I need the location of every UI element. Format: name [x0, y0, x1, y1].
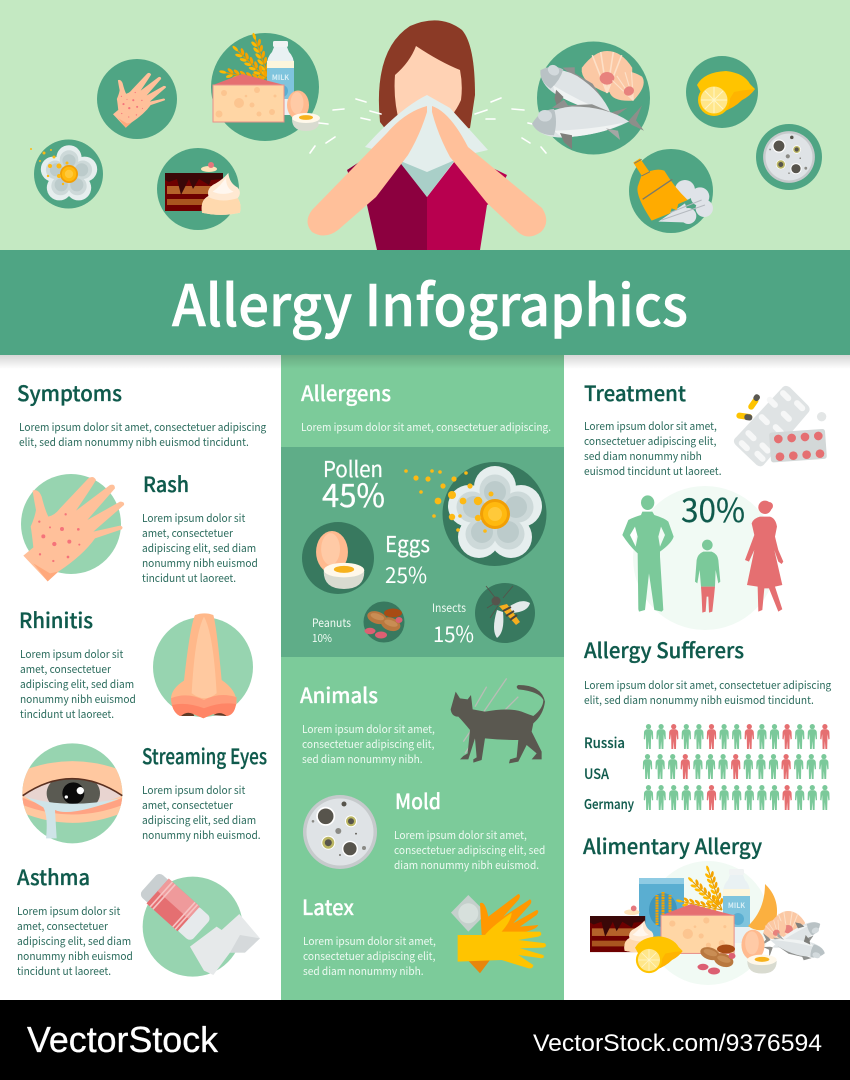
illustration: sneezing woman: [308, 20, 546, 250]
footer url: VectorStock.com/9376594: [533, 1030, 822, 1057]
text: rash description: Lorem ipsum dolor sit: [142, 511, 245, 526]
icon: egg: [302, 522, 374, 594]
text: streaming eyes description: Lorem ipsum dolor sit: [142, 783, 245, 798]
chart row: USA: [584, 754, 829, 784]
chart row: Germany: Germany: [584, 793, 635, 813]
chart: allergic people share: [622, 484, 783, 630]
icon: mold dish: [303, 795, 377, 869]
text: treatment description: euismod tincidunt ut laoreet.: [584, 464, 722, 479]
heading: rhinitis: Rhinitis: [19, 605, 93, 635]
heading: symptoms: Symptoms: [17, 378, 122, 408]
text: animals description: consectetuer adipiscing elit,: [302, 737, 434, 752]
icon: mold dish in circle: [756, 124, 822, 190]
banner shadow: [0, 355, 850, 369]
text: rash description: adipiscing elit, sed diam: [142, 541, 256, 556]
footer bar: [0, 1000, 850, 1080]
text: latex description: Lorem ipsum dolor sit amet,: [303, 934, 436, 949]
value: 15%: 15%: [433, 617, 474, 649]
text: asthma description: tincidunt ut laoreet.: [17, 964, 111, 979]
footer logo: VectorStock: [27, 1019, 219, 1060]
backdrop circle: [633, 486, 777, 630]
heading: animals: Animals: [300, 680, 378, 710]
text: allergens description: Lorem ipsum dolor sit amet, consectetuer adipiscing.: [301, 420, 551, 435]
heading: allergy sufferers: Allergy Sufferers: [584, 635, 744, 665]
text: asthma description: Lorem ipsum dolor sit: [17, 904, 120, 919]
icon: fish and shells in circle: [528, 42, 650, 154]
text: asthma description: adipiscing elit, sed diam: [17, 934, 131, 949]
icon: peanuts: [364, 602, 404, 642]
background: top scene: [0, 0, 850, 250]
text: sufferers description: Lorem ipsum dolor sit amet, consectetuer adipiscing: [584, 678, 831, 693]
icon: cat: [451, 678, 545, 763]
text: asthma description: nonummy nibh euismod: [17, 949, 133, 964]
text: streaming eyes description: nonummy nibh euismod.: [142, 828, 261, 843]
text: treatment description: Lorem ipsum dolor sit amet,: [584, 419, 717, 434]
text: rash description: amet, consectetuer: [142, 526, 234, 541]
text: sufferers description: elit, sed diam nonummy nibh euismod tincidunt.: [584, 693, 814, 708]
icon: inhaler: [138, 871, 260, 977]
heading: asthma: Asthma: [17, 862, 90, 892]
text: rhinitis description: amet, consectetuer: [20, 662, 112, 677]
heading: treatment: Treatment: [584, 378, 686, 408]
value: 10%: 10%: [312, 630, 332, 646]
label: eggs: Eggs: [385, 527, 430, 559]
chart row: Russia: [584, 724, 830, 753]
icon: nose: [153, 613, 253, 718]
heading: streaming eyes: Streaming Eyes: [142, 741, 267, 771]
value: 45%: 45%: [322, 471, 385, 517]
value: 25%: 25%: [385, 558, 427, 590]
icon: pills and blisters: [734, 386, 827, 466]
icon: streaming eye: [20, 743, 125, 843]
heading: latex: Latex: [302, 892, 354, 922]
icon: flower in circle: [30, 140, 103, 208]
text: streaming eyes description: amet, consectetuer: [142, 798, 234, 813]
text: symptoms description: elit, sed diam nonummy nibh euismod tincidunt.: [19, 435, 249, 450]
panel: centre column background: [281, 355, 564, 1000]
label: insects: Insects: [432, 600, 466, 616]
title: Allergy Infographics: [172, 261, 688, 343]
heading: allergens: Allergens: [301, 378, 391, 408]
text: rhinitis description: tincidunt ut laoreet.: [20, 707, 114, 722]
icon: bee: [475, 583, 535, 643]
panel: left column background: [0, 355, 281, 1000]
hair: [379, 20, 475, 135]
text: asthma description: amet, consectetuer: [17, 919, 109, 934]
text: mold description: consectetuer adipiscing elit, sed: [394, 843, 545, 858]
arms: [308, 106, 427, 236]
text: rhinitis description: Lorem ipsum dolor sit: [20, 647, 123, 662]
text: animals description: Lorem ipsum dolor sit amet,: [302, 722, 435, 737]
text: treatment description: consectetuer adipiscing elit,: [584, 434, 716, 449]
chart row: Russia: Russia: [584, 733, 625, 753]
text: latex description: sed diam nonummy nibh.: [303, 964, 424, 979]
heading: rash: Rash: [143, 469, 189, 499]
icon: dairy and cereals in circle: [211, 31, 320, 141]
icon: lemon in circle: [686, 56, 758, 128]
value: 30%: 30%: [681, 484, 745, 532]
text: latex description: consectetuer adipiscing elit,: [303, 949, 435, 964]
illustration: allergenic foods: [590, 861, 828, 985]
silhouettes: man, child and woman: [622, 495, 783, 613]
text: streaming eyes description: adipiscing elit, sed diam: [142, 813, 256, 828]
icon: latex gloves: [451, 894, 546, 973]
shirt: [347, 155, 427, 250]
text: rash description: tincidunt ut laoreet.: [142, 571, 236, 586]
chart row: Germany: [584, 785, 830, 813]
banner: [0, 250, 850, 355]
sneeze marks: [310, 98, 546, 153]
icon: rash hand in circle: [97, 59, 177, 139]
text: mold description: Lorem ipsum dolor sit amet,: [394, 828, 527, 843]
icon: flower with pollen: [404, 462, 546, 566]
heading: mold: Mold: [395, 786, 441, 816]
label: pollen: Pollen: [323, 452, 383, 484]
panel: allergen percentages: [281, 447, 564, 657]
tissue: [365, 95, 488, 197]
text: rhinitis description: adipiscing elit, sed diam: [20, 677, 134, 692]
icon: rash hand: [21, 474, 124, 581]
text: rhinitis description: nonummy nibh euismod: [20, 692, 136, 707]
text: symptoms description: Lorem ipsum dolor sit amet, consectetuer adipiscing: [19, 420, 266, 435]
face: [395, 46, 462, 135]
text: treatment description: sed diam nonummy nibh: [584, 449, 702, 464]
label: peanuts: Peanuts: [312, 615, 351, 631]
icon: broom and dust in circle: [629, 149, 713, 233]
icon: cake and meringue in circle: [157, 148, 241, 230]
text: mold description: diam nonummy nibh euismod.: [394, 858, 539, 873]
text: rash description: nonummy nibh euismod: [142, 556, 258, 571]
panel: right column background: [564, 355, 850, 1000]
heading: alimentary allergy: Alimentary Allergy: [583, 831, 763, 861]
text: animals description: sed diam nonummy nibh.: [302, 752, 423, 767]
chart row: USA: USA: [584, 764, 609, 784]
